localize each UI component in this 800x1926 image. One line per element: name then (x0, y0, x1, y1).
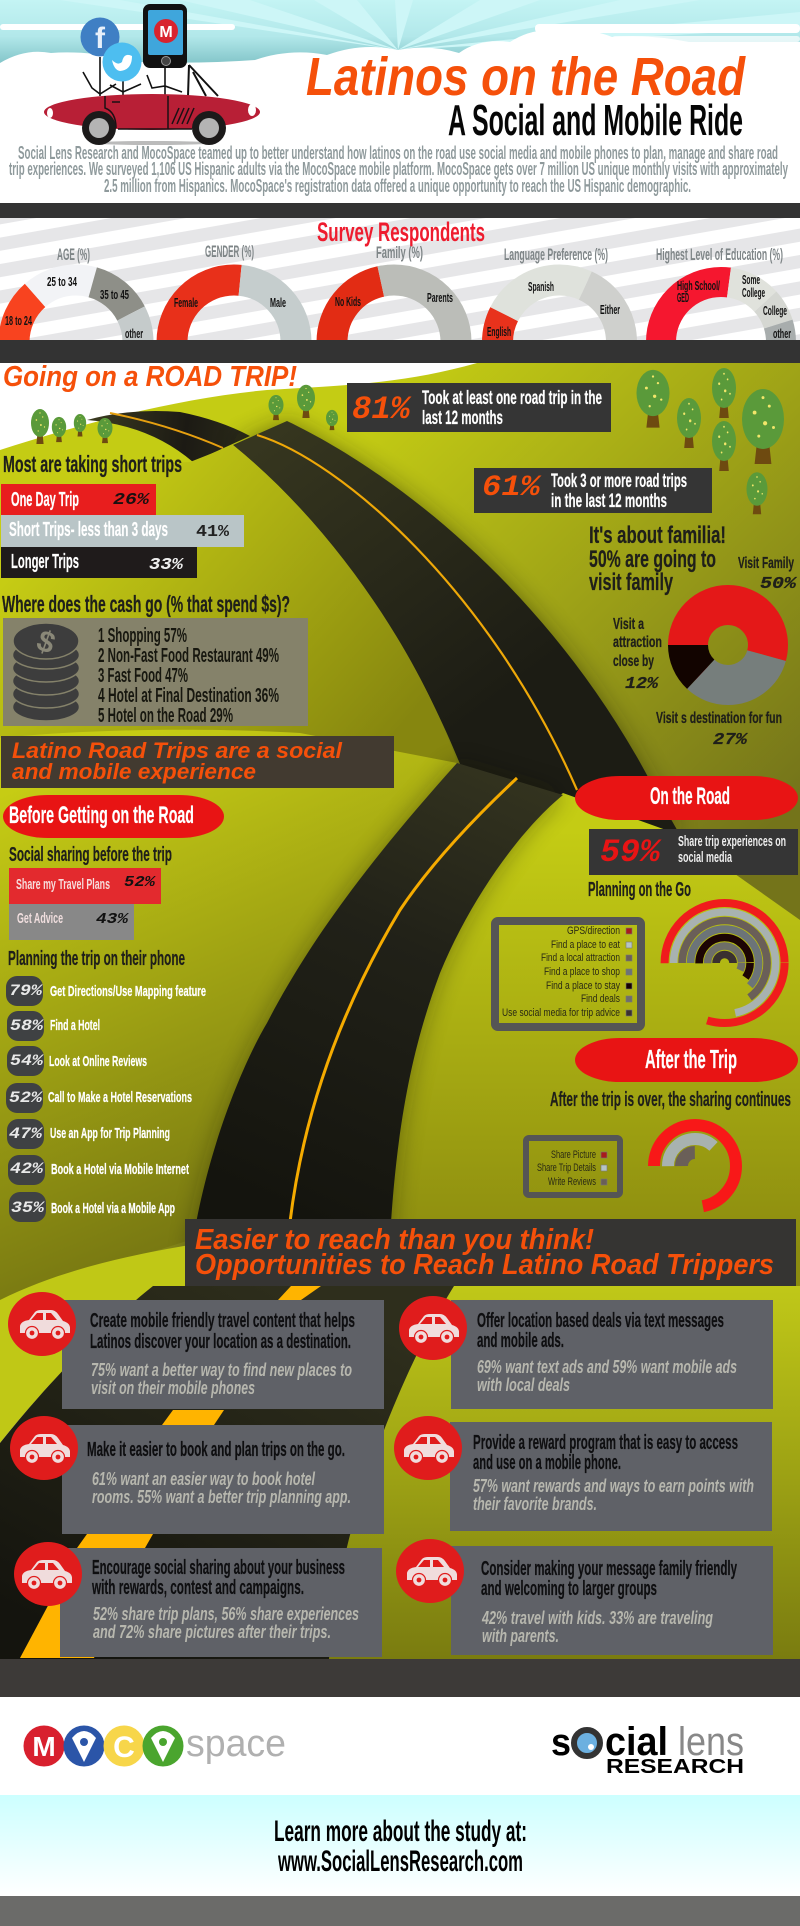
section: on the road: On the Road (650, 783, 730, 810)
icon: facebook balloon: f (95, 22, 106, 55)
stat: 61 percent: Took 3 or more road trips (551, 471, 687, 492)
list: phone planning: Call to Make a Hotel Reservations (48, 1089, 192, 1106)
bar: short trips: Short Trips- less than 3 days (9, 519, 168, 541)
heading: social sharing: Social sharing before the trip (9, 844, 172, 866)
icon: phone (143, 4, 187, 68)
chart: planning radial (665, 903, 785, 1023)
label: age: other (125, 326, 143, 341)
card: social sharing: 52% share trip plans, 56% share experiences (93, 1604, 359, 1624)
chart: gender (172, 280, 296, 404)
logo: social lens research: RESEARCH (606, 1756, 744, 1778)
bar: one day trip (1, 484, 156, 515)
stat: 59 percent: social media (678, 849, 732, 866)
card: family friendly: and welcoming to larger groups (481, 1578, 657, 1600)
label: education: High School/ (677, 278, 720, 293)
section: about familia: 50% are going to (589, 546, 716, 573)
card: easier to book (10, 1416, 384, 1534)
labels: donut: Visit a (613, 616, 644, 633)
stat: 81 percent (347, 383, 611, 432)
call to action: www.SocialLensResearch.com (277, 1845, 523, 1878)
heading: planning on phone: Planning the trip on their phone (8, 948, 185, 970)
panel: survey respondents (0, 203, 800, 404)
bar: share travel plans: Share my Travel Plans (16, 876, 110, 893)
card: reward program: and use on a mobile phone. (473, 1452, 621, 1474)
chart: education (661, 282, 781, 402)
section: most are taking short trips: Most are taking short trips (3, 451, 182, 477)
list: phone planning: Book a Hotel via a Mobile App (51, 1200, 175, 1217)
label: family: No Kids (335, 294, 361, 309)
call to action (274, 1815, 527, 1878)
logo: social lens research: cial (605, 1720, 668, 1764)
bar: get advice: Get Advice (17, 910, 63, 927)
bar: get advice: 43% (96, 911, 129, 928)
legend: planning on the go: Find a local attraction (541, 952, 620, 964)
section: before getting on the road: Before Getting on the Road (9, 802, 194, 829)
section: on the road (495, 776, 798, 1027)
card: mobile friendly content: 75% want a better way to find new places to (91, 1360, 352, 1380)
bar: longer trips (1, 547, 197, 578)
label: gender (174, 242, 286, 310)
icon: coin stack (12, 623, 80, 721)
legend: planning on the go: Find deals (581, 993, 620, 1005)
label: age: AGE (%) (57, 245, 90, 264)
card: family friendly (396, 1539, 773, 1655)
bar: one day trip: 26% (113, 491, 151, 510)
icon: trees (31, 368, 784, 514)
list: phone planning (6, 976, 206, 1222)
logo: mocospace: C (113, 1731, 135, 1764)
labels: donut: 27% (713, 731, 749, 750)
label: family: Parents (427, 290, 453, 305)
label: age: 25 to 34 (47, 274, 77, 289)
icon: coin stack: $ (32, 624, 60, 661)
card: reward program: their favorite brands. (473, 1494, 597, 1514)
legend: planning on the go: Find a place to shop (544, 966, 620, 978)
card: social sharing (14, 1542, 382, 1657)
card: mobile friendly content: Create mobile friendly travel content that helps (90, 1310, 355, 1332)
card: social sharing: with rewards, contest and campaigns. (91, 1577, 304, 1599)
label: education: College (742, 285, 765, 300)
card: mobile friendly content: Latinos discover your location as a destination. (90, 1331, 351, 1353)
card: easier to book: Make it easier to book and plan trips on the go. (87, 1439, 345, 1461)
intro paragraph (9, 143, 788, 196)
stat: 59 percent: 59% (600, 834, 662, 871)
label: age: 18 to 24 (5, 313, 32, 328)
legend: planning on the go: Find a place to stay (546, 980, 620, 992)
card: location based deals: and mobile ads. (477, 1330, 564, 1352)
label: gender: Female (174, 295, 198, 310)
legend: after the trip: Share Trip Details (537, 1162, 596, 1174)
label: family: Family (%) (376, 243, 423, 262)
list: phone planning: Look at Online Reviews (49, 1053, 147, 1070)
list: phone planning: Book a Hotel via Mobile Internet (51, 1161, 189, 1178)
section: about familia: visit family (589, 569, 673, 596)
label: language: English (487, 324, 511, 339)
banner: social and mobile experience: Latino Road Trips are a social (12, 738, 343, 763)
label: age: 35 to 45 (100, 287, 129, 302)
banner: social and mobile experience: and mobile experience (12, 759, 256, 784)
bar: share travel plans (9, 868, 161, 904)
section: after the trip (526, 1038, 798, 1207)
label: age (5, 245, 143, 341)
logo: mocospace: M (32, 1731, 56, 1762)
label: language: Language Preference (%) (504, 245, 608, 264)
banner: opportunities: Easier to reach than you think! (195, 1224, 594, 1256)
label: family (335, 243, 453, 309)
card: easier to book: rooms. 55% want a better trip planning app. (92, 1487, 351, 1507)
section: before getting on the road (3, 795, 224, 1222)
card: location based deals (399, 1296, 773, 1409)
logo: mocospace (24, 1723, 286, 1766)
banner: social and mobile experience (1, 736, 394, 788)
legend: after the trip (526, 1138, 620, 1195)
logo: social lens research: s (551, 1722, 571, 1764)
card: reward program (394, 1416, 772, 1531)
card: location based deals: with local deals (477, 1375, 570, 1395)
stat: 61 percent: 61% (482, 471, 542, 505)
stat: 81 percent: 81% (352, 391, 412, 428)
label: gender: Male (270, 295, 286, 310)
list: phone planning: 47% (9, 1125, 44, 1143)
card: easier to book: 61% want an easier way to book hotel (92, 1469, 316, 1489)
list: phone planning: Get Directions/Use Mapping feature (50, 983, 206, 1000)
banner: opportunities (185, 1219, 796, 1286)
call to action: Learn more about the study at: (274, 1815, 527, 1848)
list: phone planning: 52% (9, 1089, 44, 1107)
logo: social lens research (551, 1720, 744, 1778)
chart: after trip radial (654, 1125, 736, 1207)
list: phone planning: Use an App for Trip Planning (50, 1125, 170, 1142)
stat: 59 percent (589, 829, 798, 875)
footer panel (0, 1659, 800, 1926)
chart: age (14, 280, 138, 404)
label: language (487, 245, 620, 339)
heading: going on a road trip: Going on a ROAD TRIP! (3, 361, 297, 393)
stat: 61 percent: in the last 12 months (551, 491, 667, 512)
label: language: Either (600, 302, 620, 317)
label: gender: GENDER (%) (205, 242, 254, 261)
list: spending (98, 625, 279, 727)
list: phone planning: 42% (10, 1160, 45, 1178)
heading: planning on the go: Planning on the Go (588, 879, 691, 901)
label: education: Some (742, 272, 760, 287)
card: family friendly: with parents. (482, 1626, 559, 1646)
bar: share travel plans: 52% (124, 874, 156, 891)
list: spending: 1 Shopping 57% (98, 625, 187, 647)
legend: planning on the go: Find a place to eat (551, 939, 620, 951)
card: social sharing: and 72% share pictures after their trips. (93, 1622, 331, 1642)
legend: after the trip: Write Reviews (548, 1176, 596, 1188)
label: education (656, 245, 791, 341)
stat: 81 percent: last 12 months (422, 408, 503, 429)
list: phone planning: 35% (11, 1199, 46, 1217)
section: most are taking short trips (1, 451, 244, 578)
header panel (0, 0, 800, 210)
labels: donut: 50% (760, 575, 798, 594)
logo: social lens research: lens (678, 1720, 744, 1764)
icon: twitter balloon (102, 42, 142, 82)
list: spending: 2 Non-Fast Food Restaurant 49% (98, 645, 279, 667)
list: phone planning: 54% (10, 1052, 45, 1070)
legend: planning on the go (495, 921, 641, 1027)
card: mobile friendly content: visit on their mobile phones (91, 1378, 255, 1398)
labels: donut: attraction (613, 634, 662, 651)
banner: opportunities: Opportunities to Reach Latino Road Trippers (195, 1249, 774, 1281)
list: phone planning: Find a Hotel (50, 1017, 100, 1034)
card: social sharing: Encourage social sharing about your business (92, 1557, 345, 1579)
legend: planning on the go: Use social media for trip advice (502, 1007, 620, 1019)
heading: survey respondents: Survey Respondents (317, 217, 485, 247)
legend: planning on the go: GPS/direction (567, 925, 620, 937)
card: mobile friendly content (8, 1292, 384, 1409)
bar: short trips: 41% (196, 523, 230, 542)
labels: donut (613, 555, 798, 750)
list: spending: 3 Fast Food 47% (98, 665, 188, 687)
icon: car with social riders (44, 4, 260, 145)
icon: facebook balloon (80, 18, 120, 56)
chart: trip purpose donut (688, 605, 768, 685)
labels: donut: close by (613, 653, 654, 670)
label: language: Spanish (528, 279, 554, 294)
section: where does the cash go: Where does the cash go (% that spend $s)? (2, 591, 290, 617)
list: phone planning: 79% (9, 982, 44, 1000)
bar: short trips (1, 515, 244, 547)
stat: 61 percent (474, 468, 712, 513)
logo: mocospace: space (186, 1723, 286, 1765)
bar: longer trips: 33% (149, 556, 185, 575)
labels: donut: 12% (625, 675, 660, 694)
road landscape background (0, 363, 800, 1659)
icon: phone: M (159, 24, 173, 41)
stat: 81 percent: Took at least one road trip in the (422, 388, 602, 409)
chart: language (498, 280, 622, 404)
bar: one day trip: One Day Trip (11, 489, 79, 511)
bar: get advice (9, 904, 134, 940)
legend: after the trip: Share Picture (551, 1149, 596, 1161)
section: where does the cash go (2, 591, 308, 727)
label: education: GED (677, 290, 689, 305)
section: about familia (589, 522, 798, 750)
bar: longer trips: Longer Trips (11, 551, 79, 573)
list: spending: 4 Hotel at Final Destination 36% (98, 685, 279, 707)
section: about familia: It's about familia! (589, 522, 726, 549)
list: phone planning: 58% (10, 1017, 45, 1035)
list: spending: 5 Hotel on the Road 29% (98, 705, 233, 727)
chart: family (332, 280, 456, 404)
